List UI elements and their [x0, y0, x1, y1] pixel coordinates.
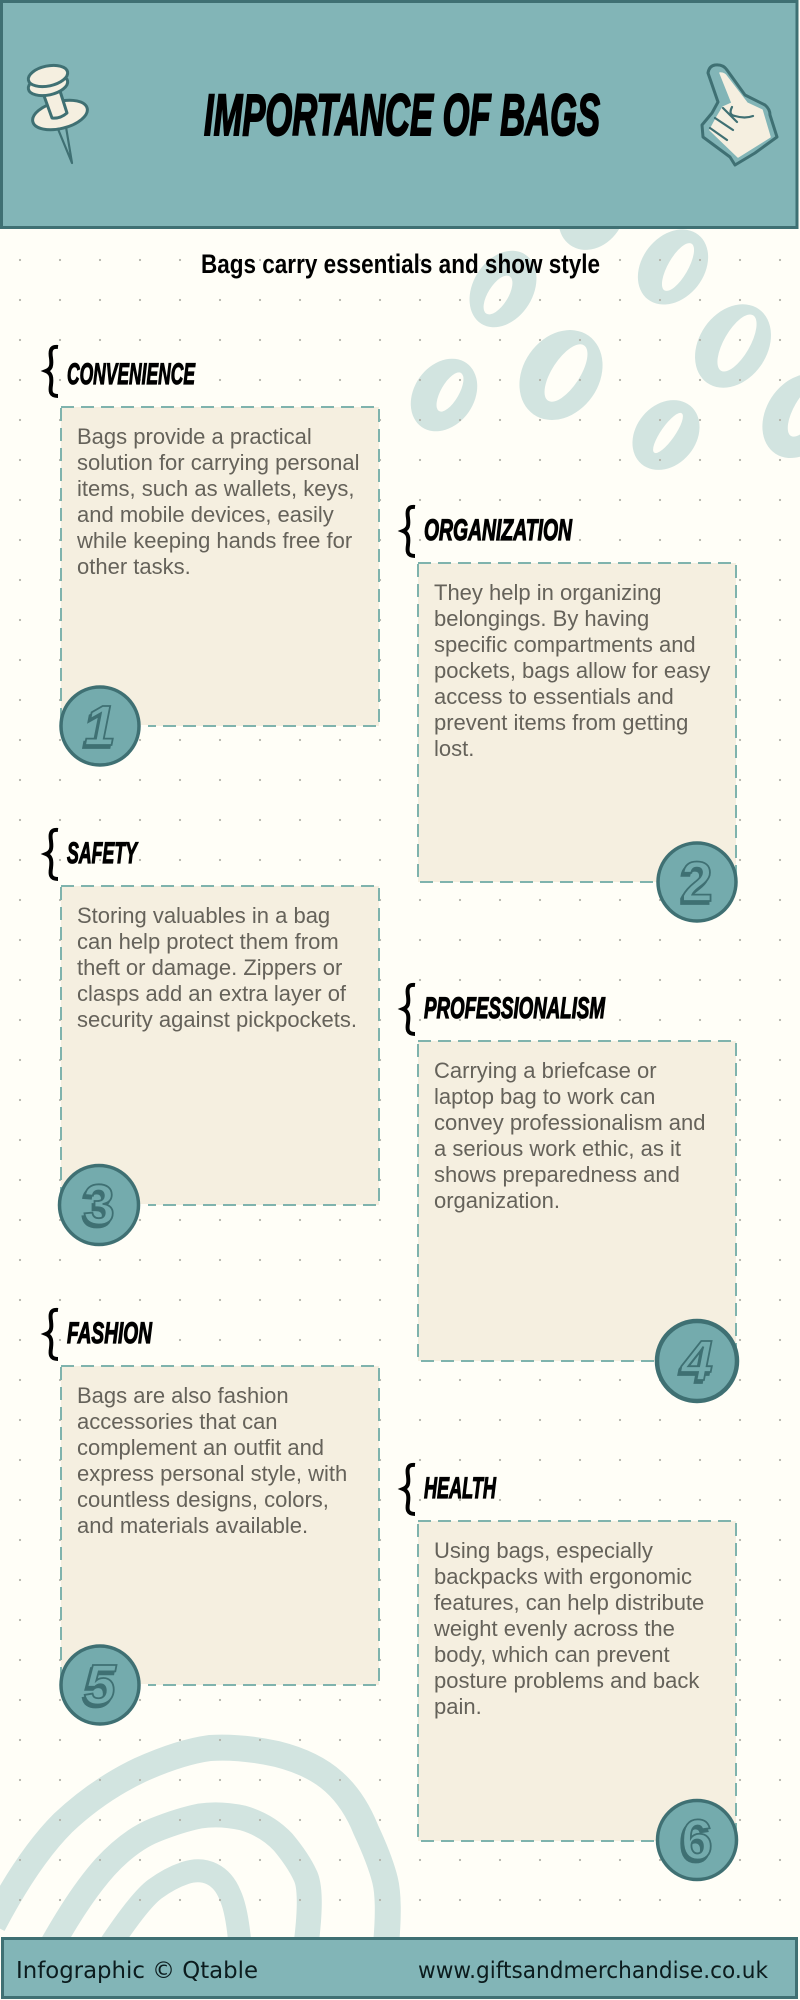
footer credit: Infographic © Qtable: [16, 1958, 258, 1984]
body text: prevent items from getting: [434, 710, 688, 735]
body text: Carrying a briefcase or: [434, 1058, 657, 1083]
footer website: www.giftsandmerchandise.co.uk: [418, 1958, 769, 1984]
number badge 4: 4: [678, 1332, 711, 1396]
number badge 5: [61, 1646, 139, 1724]
number badge 1: 1: [84, 694, 116, 758]
heading: fashion: FASHION: [67, 1317, 153, 1350]
dash gap: [138, 1684, 148, 1686]
body text: laptop bag to work can: [434, 1084, 655, 1109]
body text: express personal style, with: [77, 1461, 347, 1486]
panel: fashion: [46, 1310, 379, 1724]
body text: lost.: [434, 736, 474, 761]
decorative rings: top right: [397, 165, 800, 483]
number badge 6: 6: [681, 1808, 713, 1872]
number badge 6: [658, 1800, 736, 1880]
body text: countless designs, colors,: [77, 1487, 329, 1512]
card: [61, 886, 379, 1205]
body text: can help protect them from: [77, 929, 339, 954]
body text: solution for carrying personal: [77, 450, 359, 475]
icon: push pin: [26, 62, 90, 163]
body text: belongings. By having: [434, 606, 649, 631]
heading: professionalism: PROFESSIONALISM: [424, 992, 606, 1025]
body text: security against pickpockets.: [77, 1007, 357, 1032]
panel: convenience: [46, 347, 379, 765]
number badge 4: [657, 1321, 737, 1401]
number badge 2: [658, 843, 736, 921]
heading: health: HEALTH: [424, 1472, 497, 1505]
body text: theft or damage. Zippers or: [77, 955, 342, 980]
body text: items, such as wallets, keys,: [77, 476, 355, 501]
body text: pain.: [434, 1694, 482, 1719]
body text: convey professionalism and: [434, 1110, 705, 1135]
body text: and materials available.: [77, 1513, 308, 1538]
number badge 1: 1: [82, 697, 114, 761]
heading: organization: [403, 507, 573, 556]
body text: Storing valuables in a bag: [77, 903, 330, 928]
header banner: [2, 2, 797, 228]
number badge 1: [61, 687, 139, 765]
heading: convenience: CONVENIENCE: [67, 358, 196, 391]
heading: safety: SAFETY: [67, 837, 139, 870]
body text: shows preparedness and: [434, 1162, 680, 1187]
number badge 5: 5: [84, 1653, 117, 1717]
body text: specific compartments and: [434, 632, 696, 657]
card: [418, 563, 736, 882]
number badge 6: 6: [679, 1811, 711, 1875]
body text: posture problems and back: [434, 1668, 700, 1693]
body text: backpacks with ergonomic: [434, 1564, 692, 1589]
body text: Bags are also fashion: [77, 1383, 289, 1408]
body text: other tasks.: [77, 554, 191, 579]
icon: pointing hand: [702, 65, 777, 165]
number badge 3: [60, 1166, 138, 1244]
body text: accessories that can: [77, 1409, 278, 1434]
body text: weight evenly across the: [433, 1616, 675, 1641]
card: [61, 1366, 379, 1685]
card: [61, 407, 379, 726]
body text: Using bags, especially: [434, 1538, 653, 1563]
number badge 4: 4: [680, 1329, 713, 1393]
subtitle: Bags carry essentials and show style: [201, 249, 600, 279]
footer banner: [2, 1938, 796, 1998]
body text: They help in organizing: [434, 580, 661, 605]
body text: features, can help distribute: [434, 1590, 704, 1615]
number badge 3: 3: [83, 1173, 115, 1237]
heading: health: [403, 1465, 497, 1514]
heading: fashion: [46, 1310, 153, 1359]
body text: pockets, bags allow for easy: [434, 658, 710, 683]
body text: clasps add an extra layer of: [77, 981, 347, 1006]
dash gap: [138, 1204, 148, 1206]
decorative arcs: bottom left: [0, 1748, 388, 1945]
number badge 3: 3: [81, 1176, 113, 1240]
panel: health: [403, 1465, 736, 1880]
body text: complement an outfit and: [77, 1435, 324, 1460]
card: [418, 1041, 736, 1361]
number badge 5: 5: [82, 1656, 115, 1720]
dash gap: [138, 725, 148, 727]
panel: organization: [403, 507, 736, 921]
body text: while keeping hands free for: [76, 528, 352, 553]
body text: body, which can prevent: [434, 1642, 670, 1667]
number badge 2: 2: [679, 853, 711, 917]
heading: professionalism: [403, 985, 606, 1034]
heading: convenience: [46, 347, 196, 396]
body text: a serious work ethic, as it: [434, 1136, 681, 1161]
panel: safety: [46, 830, 379, 1244]
body text: Bags provide a practical: [77, 424, 312, 449]
heading: organization: ORGANIZATION: [424, 514, 573, 547]
body text: organization.: [434, 1188, 560, 1213]
card: [418, 1521, 736, 1841]
body text: access to essentials and: [434, 684, 674, 709]
heading: safety: [46, 830, 139, 879]
number badge 2: 2: [681, 850, 713, 914]
body text: and mobile devices, easily: [77, 502, 334, 527]
panel: professionalism: [403, 985, 737, 1401]
